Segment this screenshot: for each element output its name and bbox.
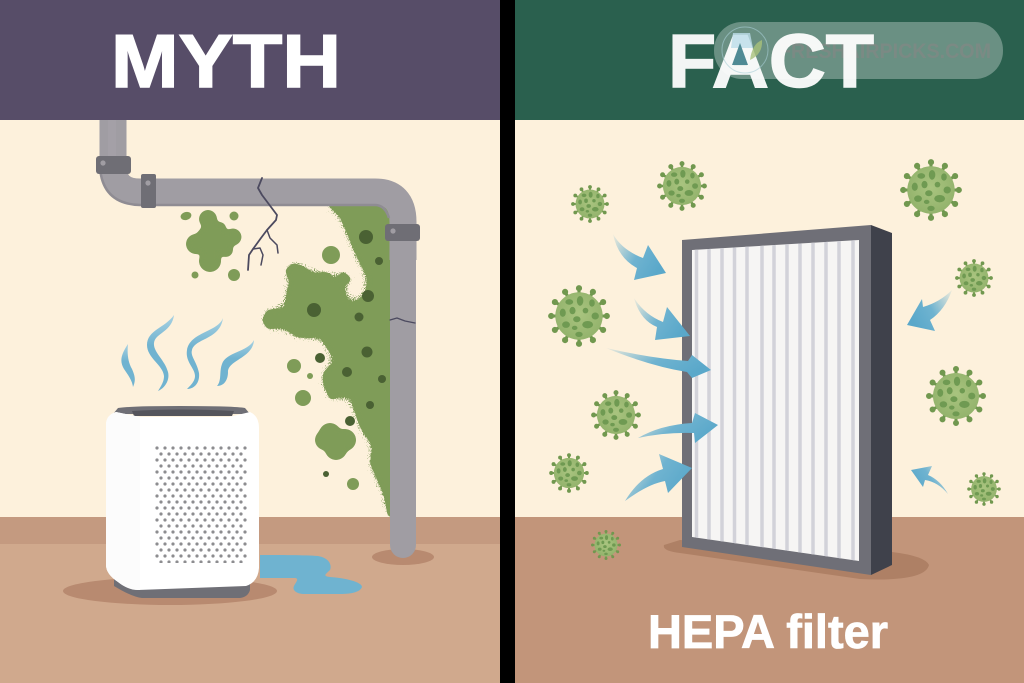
air purifier [63,406,277,605]
watermark text: FRESHAIRPICKS.COM [779,40,991,63]
HEPA filter [664,225,929,579]
mould patch on wall [262,200,395,517]
filter pleats [696,240,853,565]
heading: fact: FACT [668,19,874,103]
odour wisps [121,315,254,391]
crack in pipe and wall [248,178,415,323]
panel: myth [0,0,500,683]
heading: myth [0,0,500,120]
divider [500,0,515,683]
airflow arrows [606,234,952,501]
panel: fact [515,0,1024,683]
virus particles [550,161,1000,559]
water puddle [260,555,362,594]
watermark logo [722,27,768,73]
pipe [96,120,434,565]
heading: myth: MYTH [111,19,341,103]
pipe clamps [96,156,420,241]
purifier grille [155,446,247,563]
label: HEPA filter: HEPA filter [648,605,888,658]
watermark pill [714,22,1003,79]
small mould blob [180,210,242,281]
